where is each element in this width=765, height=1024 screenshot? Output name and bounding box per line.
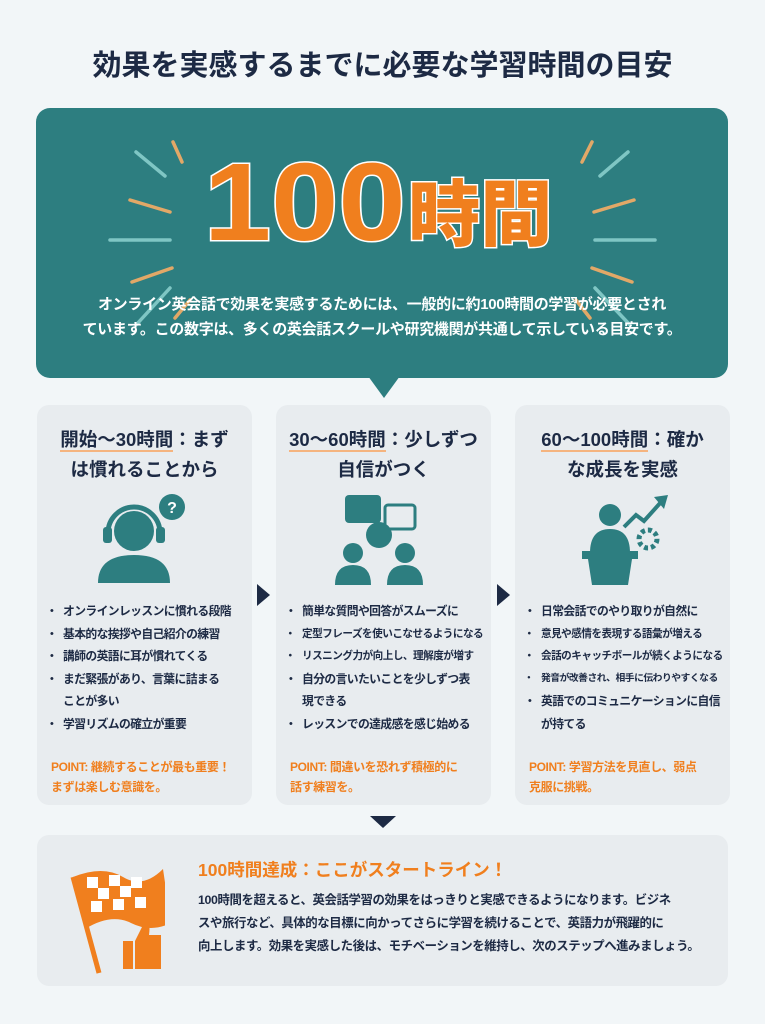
bullet list: 自分の言いたいことを少しずつ表 [302,672,470,686]
card heading: 60〜100時間：確か [541,429,704,450]
hero description: オンライン英会話で効果を実感するためには、一般的に約100時間の学習が必要とされ [98,296,666,313]
bullet list [50,604,232,730]
point: POINT: 間違いを恐れず積極的に [290,760,457,774]
down arrow [370,816,396,828]
arrow [497,584,510,606]
bullet list: 会話のキャッチボールが続くようになる [541,650,723,662]
hero description [83,296,681,338]
bottom text: 向上します。効果を実感した後は、モチベーションを維持し、次のステップへ進みましょう。 [198,939,699,953]
bottom panel [37,835,728,986]
bullet list: 学習リズムの確立が重要 [63,716,186,730]
card heading: 30〜60時間：少しずつ [289,429,478,450]
pointer triangle [368,376,400,398]
bullet list [528,604,723,730]
bullet list [288,604,483,730]
point: POINT: 学習方法を見直し、弱点 [529,760,696,774]
bullet list: 発音が改善され、相手に伝わりやすくなる [541,672,718,684]
headline number [204,141,552,264]
card heading [289,429,478,480]
icon: headset person [98,494,185,583]
bullet list: 意見や感情を表現する語彙が増える [541,628,702,640]
point [51,760,230,794]
bullet list: 定型フレーズを使いこなせるようになる [302,628,483,640]
hero description: ています。この数字は、多くの英会話スクールや研究機関が共通して示している目安です。 [83,321,681,338]
headline number: 時間 [408,176,552,256]
icon: headset person: ? [167,500,177,517]
card heading: 開始〜30時間：まず [60,429,229,450]
bullet list: が持てる [541,716,586,730]
card heading: 自信がつく [337,459,430,480]
arrow [257,584,270,606]
bullet list: 簡単な質問や回答がスムーズに [302,604,458,618]
card: 0-30 hours [37,405,252,805]
point: 話す練習を。 [290,780,360,794]
point: まずは楽しむ意識を。 [51,780,167,794]
card heading: な成長を実感 [567,459,678,480]
bullet list: レッスンでの達成感を感じ始める [302,716,470,730]
bottom heading: 100時間達成：ここがスタートライン！ [198,860,507,880]
bullet list: まだ緊張があり、言葉に詰まる [63,672,219,686]
bottom text: 100時間を超えると、英会話学習の効果をはっきりと実感できるようになります。ビジネ [198,893,671,907]
point: POINT: 継続することが最も重要！ [51,760,230,774]
title: 効果を実感するまでに必要な学習時間の目安 [92,50,672,82]
bottom text [198,893,699,953]
bullet list: 英語でのコミュニケーションに自信 [541,694,720,708]
card: 60-100 hours [515,405,730,805]
card heading [541,429,704,480]
icon: checkered flag and thumbs up [70,869,165,974]
card heading [60,429,229,480]
point [290,760,457,794]
headline number: 100 [204,141,405,264]
bullet list: 現できる [302,694,347,708]
bullet list: リスニング力が向上し、理解度が増す [302,650,474,662]
card: 30-60 hours [276,405,491,805]
icon: speaker growth [582,495,668,585]
point [529,760,696,794]
bottom text: スや旅行など、具体的な目標に向かってさらに学習を続けることで、英語力が飛躍的に [198,916,664,930]
bullet list: ことが多い [63,694,119,708]
point: 克服に挑戦。 [529,780,599,794]
hero panel [36,108,728,378]
card heading: は慣れることから [70,459,218,480]
bullet list: 日常会話でのやり取りが自然に [541,604,698,618]
bullet list: 基本的な挨拶や自己紹介の練習 [63,626,220,640]
burst lines [108,140,657,327]
icon: conversation [335,495,423,585]
bullet list: 講師の英語に耳が慣れてくる [63,649,208,663]
bullet list: オンラインレッスンに慣れる段階 [63,604,231,618]
